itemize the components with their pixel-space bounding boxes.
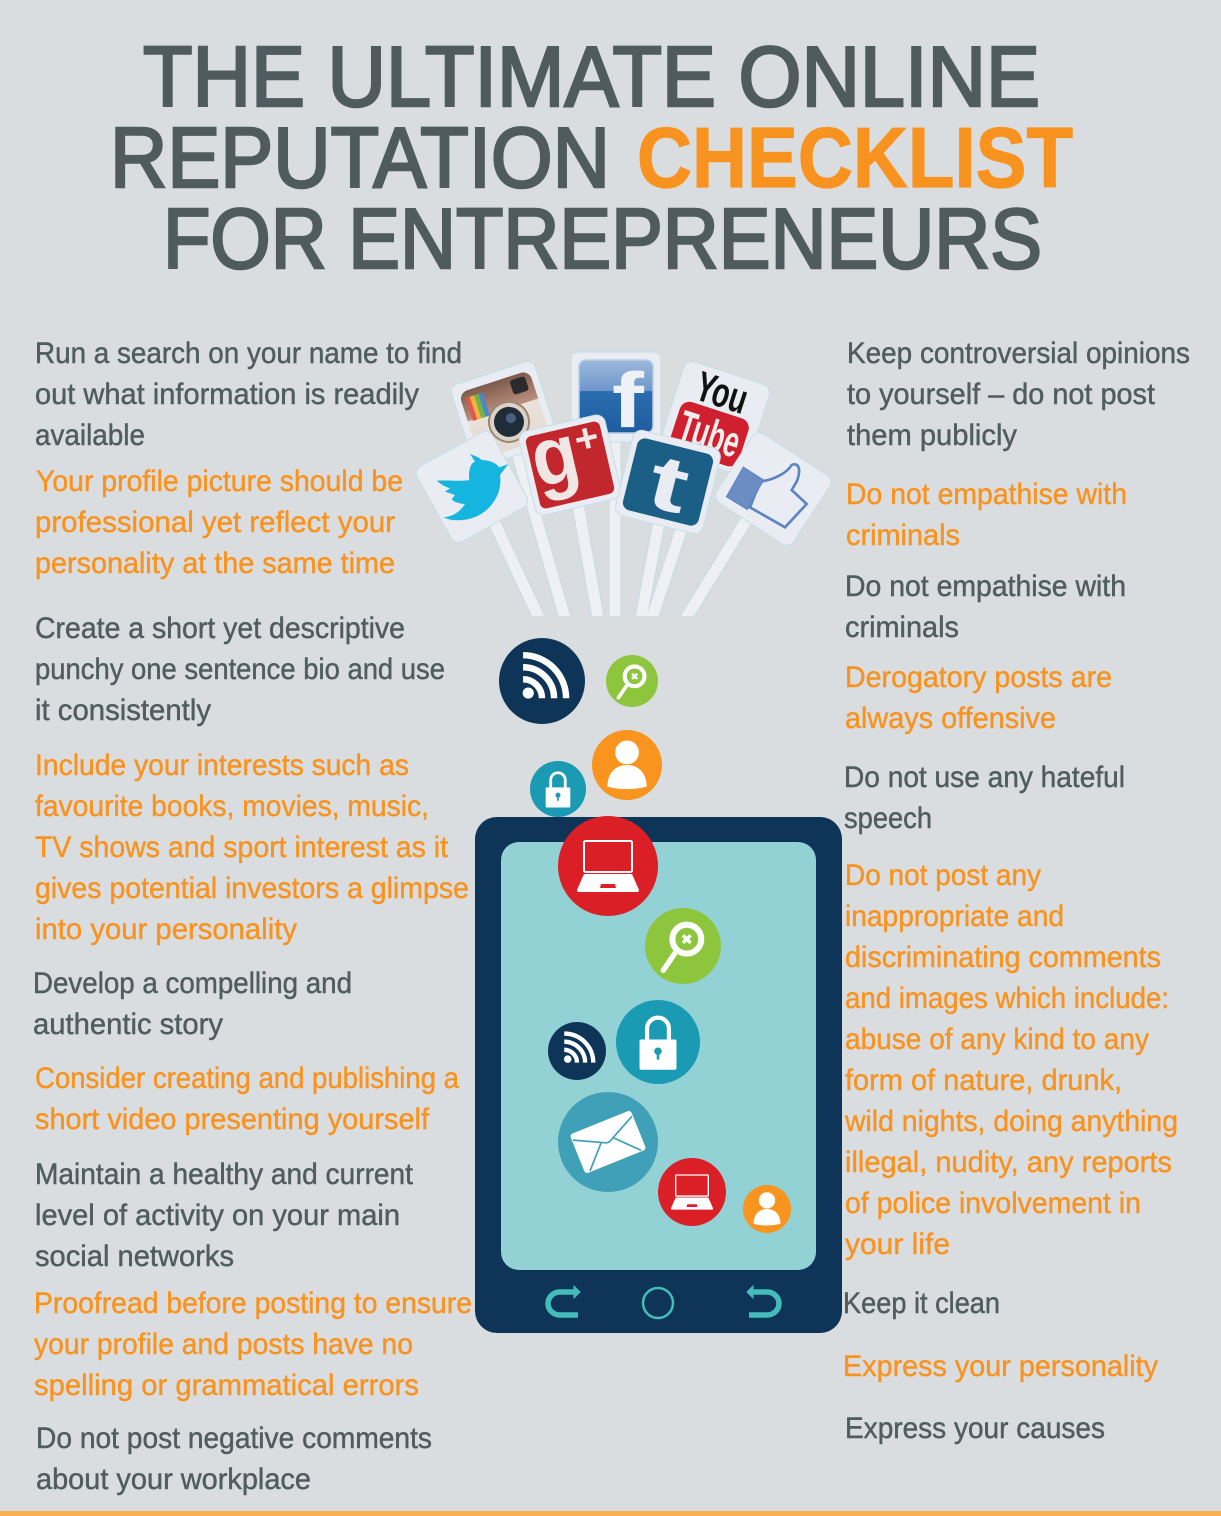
icon: rss large (499, 638, 585, 724)
icon: search large (645, 908, 721, 984)
icon: rss small (548, 1022, 606, 1080)
icon: search small (606, 655, 658, 707)
icon: google plus sign (514, 399, 623, 517)
item: short bio: it consistently (35, 694, 211, 727)
item: run a search: available (35, 419, 145, 452)
item: controversial opinions: to yourself – do not post (847, 378, 1156, 411)
item: inappropriate comments: form of nature, drunk, (845, 1064, 1122, 1097)
icon: person (592, 730, 662, 800)
icon: lock small (530, 761, 586, 817)
item: story (33, 967, 352, 1041)
item: interests: Include your interests such as (35, 749, 409, 782)
item: inappropriate comments: of police involvement in (845, 1187, 1141, 1220)
title: FOR ENTREPRENEURS (163, 192, 1042, 287)
item: proofread: your profile and posts have no (34, 1328, 413, 1361)
item: empathise (grey): criminals (845, 611, 959, 644)
item: activity: Maintain a healthy and current (35, 1158, 414, 1191)
item: derogatory posts: Derogatory posts are (845, 661, 1112, 694)
home button (643, 1288, 673, 1318)
tablet device (475, 817, 842, 1333)
item: run a search: Run a search on your name to find (35, 337, 462, 370)
item: profile picture: personality at the same time (35, 547, 395, 580)
item: run a search (35, 337, 462, 452)
bottom orange strip (0, 1511, 1221, 1516)
item: empathise (orange) (846, 478, 1127, 552)
return button (747, 1286, 779, 1315)
item: inappropriate comments (844, 859, 1178, 1261)
icon: facebook sign (571, 352, 661, 444)
item: story: authentic story (33, 1008, 223, 1041)
title (110, 30, 1073, 287)
icon: twitter sign (414, 429, 530, 545)
item: empathise (orange): Do not empathise with (846, 478, 1127, 511)
item: keep it clean: Keep it clean (843, 1287, 1000, 1320)
tablet body (475, 817, 842, 1333)
item: inappropriate comments: illegal, nudity, any reports (845, 1146, 1172, 1179)
item: profile picture: professional yet reflect your (35, 506, 395, 539)
item: interests: favourite books, movies, music, (35, 790, 429, 823)
item: interests: TV shows and sport interest as it (35, 831, 449, 864)
icon: like thumb sign (712, 430, 834, 548)
item: interests: into your personality (35, 913, 297, 946)
item: inappropriate comments: Do not post any (845, 859, 1041, 892)
item: hateful speech: speech (844, 802, 932, 835)
item: profile picture (35, 465, 403, 580)
item: short video: Consider creating and publishing a (35, 1062, 459, 1095)
item: proofread (34, 1287, 472, 1402)
left column checklist (33, 337, 472, 1496)
icon: google plus sign: g (522, 406, 587, 505)
icon: tumblr sign (613, 428, 722, 537)
item: activity (35, 1158, 414, 1273)
item: inappropriate comments: abuse of any kind to any (845, 1023, 1149, 1056)
item: short bio (35, 612, 445, 727)
item: empathise (grey): Do not empathise with (845, 570, 1126, 603)
icon: youtube sign: Tube (672, 402, 746, 467)
item: express personality: Express your personality (843, 1350, 1158, 1383)
icon: tumblr sign: t (640, 436, 698, 531)
icon: laptop small (658, 1158, 726, 1226)
item: short video: short video presenting yourself (35, 1103, 430, 1136)
item: inappropriate comments: your life (845, 1228, 950, 1261)
tablet screen (501, 842, 816, 1270)
icon: facebook sign: f (612, 356, 645, 444)
social media signs illustration (414, 352, 834, 618)
right column checklist (843, 337, 1190, 1445)
item: controversial opinions: Keep controversial opinions (847, 337, 1190, 370)
item: derogatory posts: always offensive (845, 702, 1056, 735)
item: inappropriate comments: wild nights, doing anything (844, 1105, 1178, 1138)
item: express causes: Express your causes (845, 1412, 1105, 1445)
item: story: Develop a compelling and (33, 967, 352, 1000)
icon: mail (558, 1092, 658, 1192)
item: activity: social networks (35, 1240, 234, 1273)
item: inappropriate comments: and images which include: (845, 982, 1169, 1015)
icon: instagram sign (449, 359, 559, 468)
item: empathise (orange): criminals (846, 519, 960, 552)
icon: laptop large (558, 816, 658, 916)
item: proofread: Proofread before posting to ensure (34, 1287, 472, 1320)
item: inappropriate comments: inappropriate and (845, 900, 1064, 933)
icon: lock large (616, 1000, 700, 1084)
icon: google plus sign: + (570, 414, 603, 463)
title: REPUTATION (110, 111, 610, 206)
item: short bio: Create a short yet descriptive (35, 612, 405, 645)
title: CHECKLIST (637, 111, 1073, 206)
item: short bio: punchy one sentence bio and use (35, 653, 445, 686)
item: negative comments: about your workplace (36, 1463, 311, 1496)
item: profile picture: Your profile picture should be (36, 465, 403, 498)
item: negative comments: Do not post negative comments (36, 1422, 432, 1455)
title: THE ULTIMATE ONLINE (143, 30, 1040, 125)
item: short video (35, 1062, 459, 1136)
item: inappropriate comments: discriminating comments (845, 941, 1161, 974)
item: interests (35, 749, 469, 946)
item: empathise (grey) (845, 570, 1126, 644)
icon: youtube sign (657, 356, 773, 477)
icon: youtube sign: You (690, 362, 754, 423)
item: activity: level of activity on your main (35, 1199, 400, 1232)
back button (548, 1286, 580, 1315)
sign sticks (489, 442, 752, 616)
item: negative comments (36, 1422, 432, 1496)
item: proofread: spelling or grammatical errors (34, 1369, 419, 1402)
item: hateful speech (844, 761, 1125, 835)
item: controversial opinions (847, 337, 1190, 452)
item: run a search: out what information is readily (35, 378, 419, 411)
item: interests: gives potential investors a glimpse (35, 872, 469, 905)
icon: person small (743, 1185, 791, 1233)
item: controversial opinions: them publicly (847, 419, 1017, 452)
item: derogatory posts (845, 661, 1112, 735)
item: hateful speech: Do not use any hateful (844, 761, 1125, 794)
